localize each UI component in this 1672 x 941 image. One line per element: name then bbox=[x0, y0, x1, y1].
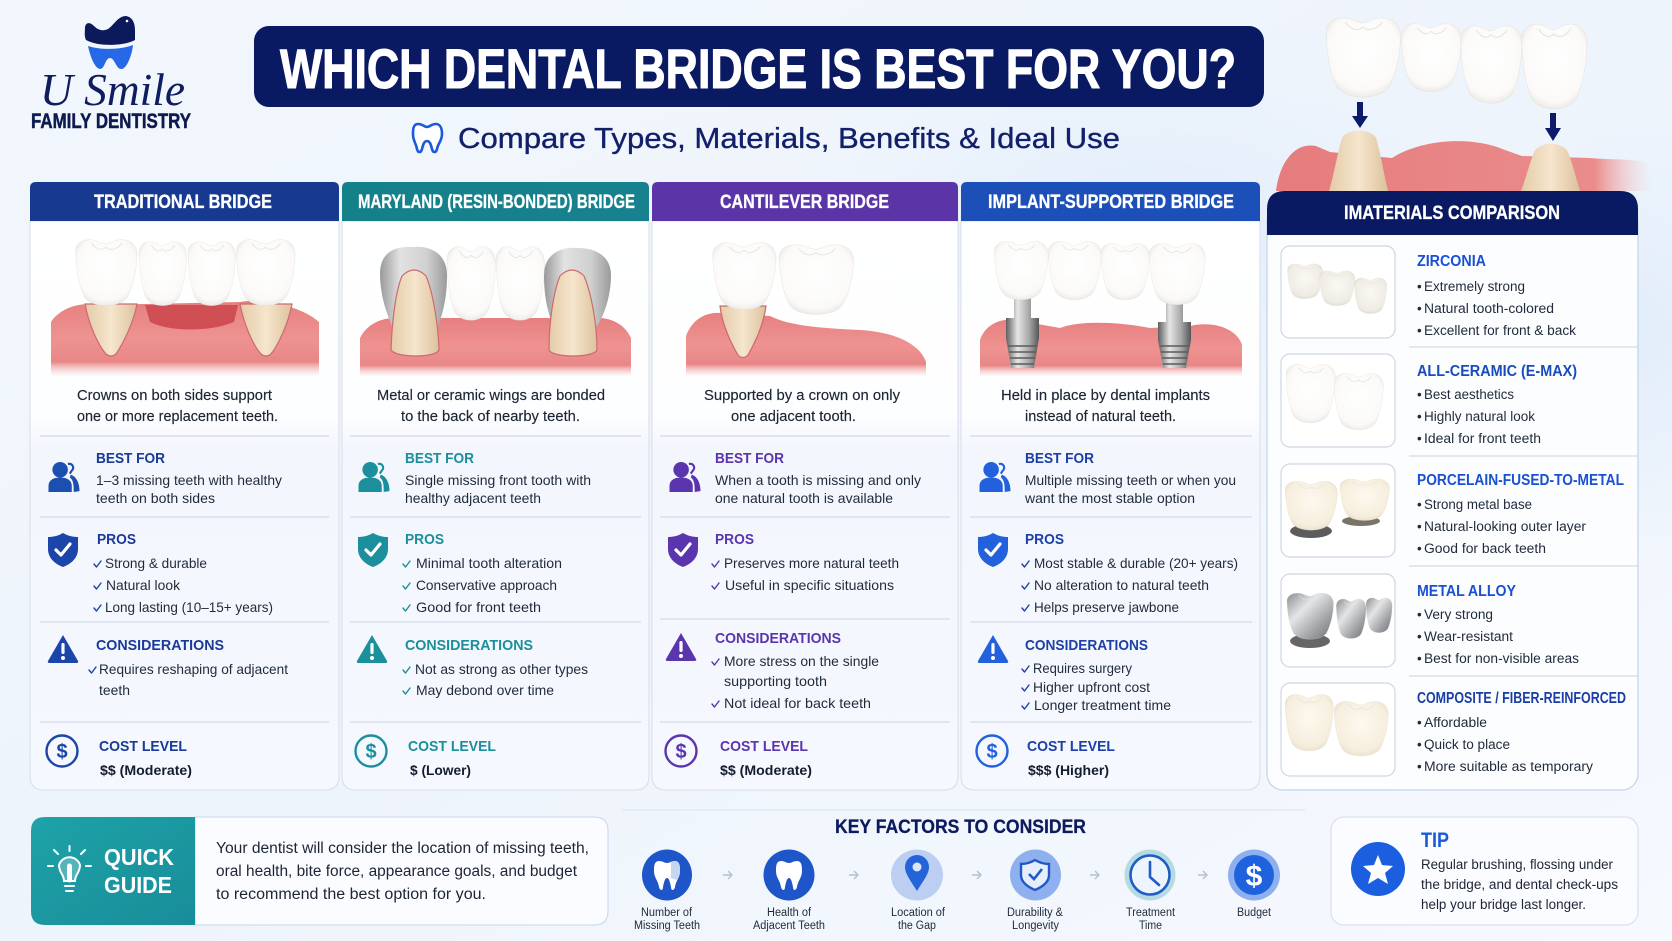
cost level: COST LEVEL bbox=[99, 738, 187, 755]
material: metal alloy: • bbox=[1417, 629, 1422, 644]
panel: implant-supported bridge bbox=[961, 182, 1260, 790]
header bbox=[1267, 191, 1638, 235]
title banner: WHICH DENTAL BRIDGE IS BEST FOR YOU? bbox=[280, 37, 1236, 100]
best for: Multiple missing teeth or when you bbox=[1025, 472, 1236, 488]
considerations: Requires reshaping of adjacent bbox=[99, 661, 288, 677]
material: composite: Quick to place bbox=[1424, 737, 1510, 752]
best for: When a tooth is missing and only bbox=[715, 472, 921, 488]
tip heading: TIP bbox=[1421, 829, 1449, 852]
illustration: bridge being placed on abutments bbox=[1276, 18, 1651, 191]
factor: number of missing teeth: Missing Teeth bbox=[634, 920, 700, 932]
pros: Useful in specific situations bbox=[725, 577, 894, 593]
material: metal alloy: • bbox=[1417, 651, 1422, 666]
description: Held in place by dental implants bbox=[1001, 388, 1210, 404]
best for bbox=[980, 450, 1236, 506]
quick guide text: oral health, bite force, appearance goals, and budget bbox=[216, 863, 578, 880]
cost level bbox=[666, 736, 812, 778]
description: one adjacent tooth. bbox=[731, 409, 856, 425]
considerations: CONSIDERATIONS bbox=[715, 630, 841, 647]
considerations: Not ideal for back teeth bbox=[724, 695, 871, 711]
quick guide text: Your dentist will consider the location of missing teeth, bbox=[216, 840, 589, 857]
material: metal alloy: • bbox=[1417, 607, 1422, 622]
material: zirconia: Excellent for front & back bbox=[1424, 323, 1576, 338]
description bbox=[377, 388, 605, 425]
icon: star bbox=[1351, 842, 1405, 896]
description: to the back of nearby teeth. bbox=[401, 409, 580, 425]
cost level: $$ (Moderate) bbox=[100, 762, 192, 778]
header: CANTILEVER BRIDGE bbox=[720, 192, 889, 213]
cost level bbox=[356, 736, 496, 778]
material: all-ceramic: Best aesthetics bbox=[1424, 387, 1514, 402]
panel: materials comparison bbox=[1267, 191, 1638, 790]
cost level bbox=[46, 736, 192, 778]
factor: treatment time bbox=[1124, 850, 1176, 932]
panel: maryland bridge bbox=[342, 182, 649, 790]
description bbox=[704, 388, 901, 425]
pros: PROS bbox=[405, 531, 444, 548]
cost level: $ bbox=[365, 741, 377, 763]
considerations: supporting tooth bbox=[724, 673, 827, 689]
best for: one natural tooth is available bbox=[715, 490, 893, 506]
material: porcelain-fused-to-metal bbox=[1281, 464, 1624, 557]
material: composite: More suitable as temporary bbox=[1424, 759, 1593, 774]
factor: health of adjacent teeth bbox=[753, 850, 825, 932]
arrows bbox=[723, 871, 1207, 879]
material: composite: • bbox=[1417, 737, 1422, 752]
illustration bbox=[980, 241, 1242, 377]
material: porcelain-fused-to-metal: Good for back teeth bbox=[1424, 541, 1546, 556]
factor: number of missing teeth: Number of bbox=[641, 907, 693, 919]
material: all-ceramic: • bbox=[1417, 409, 1422, 424]
pros: Conservative approach bbox=[416, 577, 557, 593]
considerations bbox=[48, 635, 288, 698]
header bbox=[961, 182, 1260, 221]
best for bbox=[48, 450, 282, 506]
material: composite bbox=[1281, 683, 1626, 776]
material: zirconia: Natural tooth-colored bbox=[1424, 301, 1554, 316]
considerations: May debond over time bbox=[416, 682, 554, 698]
material: metal alloy: Very strong bbox=[1424, 607, 1493, 622]
best for bbox=[670, 450, 921, 506]
considerations: teeth bbox=[99, 682, 130, 698]
best for: 1–3 missing teeth with healthy bbox=[96, 472, 282, 488]
factor: durability and longevity: Durability & bbox=[1007, 907, 1063, 919]
pros: Natural look bbox=[106, 577, 181, 593]
pros bbox=[978, 531, 1238, 615]
heading: KEY FACTORS TO CONSIDER bbox=[835, 817, 1086, 838]
header bbox=[30, 182, 339, 221]
factor: budget: Budget bbox=[1237, 907, 1272, 919]
material: metal alloy: Wear-resistant bbox=[1424, 629, 1513, 644]
factor: number of missing teeth bbox=[634, 850, 700, 932]
panel: traditional bridge bbox=[30, 182, 339, 790]
tip text bbox=[1421, 857, 1618, 912]
description bbox=[77, 388, 278, 425]
best for: BEST FOR bbox=[715, 450, 784, 467]
best for bbox=[358, 450, 591, 506]
factor: durability and longevity bbox=[1007, 850, 1063, 932]
factor: treatment time: Time bbox=[1139, 920, 1162, 932]
pros bbox=[668, 531, 899, 593]
material: all-ceramic: Ideal for front teeth bbox=[1424, 431, 1541, 446]
considerations: CONSIDERATIONS bbox=[405, 637, 533, 654]
considerations: Longer treatment time bbox=[1034, 697, 1171, 713]
material: porcelain-fused-to-metal: Natural-looking outer layer bbox=[1424, 519, 1587, 534]
quick guide text bbox=[216, 840, 589, 903]
pros: Long lasting (10–15+ years) bbox=[105, 599, 273, 615]
considerations: Higher upfront cost bbox=[1033, 679, 1150, 695]
logo: U Smile Family Dentistry: U Smile bbox=[40, 65, 185, 115]
quick guide text: to recommend the best option for you. bbox=[216, 886, 486, 903]
material: porcelain-fused-to-metal: • bbox=[1417, 541, 1422, 556]
material: metal alloy: Best for non-visible areas bbox=[1424, 651, 1579, 666]
material: all-ceramic bbox=[1281, 354, 1577, 447]
material: composite: Affordable bbox=[1424, 715, 1487, 730]
material: porcelain-fused-to-metal: PORCELAIN-FUSED-TO-METAL bbox=[1417, 472, 1624, 489]
material: all-ceramic: ALL-CERAMIC (E-MAX) bbox=[1417, 363, 1577, 380]
material: all-ceramic: Highly natural look bbox=[1424, 409, 1535, 424]
considerations: Requires surgery bbox=[1033, 660, 1132, 676]
cost level: $$$ (Higher) bbox=[1028, 762, 1109, 778]
description: instead of natural teeth. bbox=[1025, 409, 1176, 425]
pros: No alteration to natural teeth bbox=[1034, 577, 1209, 593]
considerations bbox=[357, 635, 588, 698]
material: composite: COMPOSITE / FIBER-REINFORCED bbox=[1417, 690, 1626, 707]
panel: cantilever bridge bbox=[652, 182, 958, 790]
material: composite: • bbox=[1417, 715, 1422, 730]
factor: budget: $ bbox=[1246, 860, 1263, 893]
header: MARYLAND (RESIN-BONDED) BRIDGE bbox=[358, 192, 635, 213]
best for: BEST FOR bbox=[405, 450, 474, 467]
material: all-ceramic: • bbox=[1417, 387, 1422, 402]
tip text: Regular brushing, flossing under bbox=[1421, 857, 1613, 872]
header: IMPLANT-SUPPORTED BRIDGE bbox=[988, 192, 1234, 213]
description: Metal or ceramic wings are bonded bbox=[377, 388, 605, 404]
material: metal alloy: METAL ALLOY bbox=[1417, 583, 1517, 600]
cost level: COST LEVEL bbox=[408, 738, 496, 755]
factor: location of the gap: Location of bbox=[891, 907, 946, 919]
material: composite: • bbox=[1417, 759, 1422, 774]
icon: light bulb bbox=[48, 846, 91, 891]
cost level: COST LEVEL bbox=[720, 738, 808, 755]
factor: health of adjacent teeth: Adjacent Teeth bbox=[753, 920, 825, 932]
considerations bbox=[978, 635, 1171, 713]
considerations: Not as strong as other types bbox=[415, 661, 588, 677]
pros bbox=[358, 531, 562, 615]
cost level: $ (Lower) bbox=[410, 762, 471, 778]
quick guide panel bbox=[31, 817, 608, 925]
factor: health of adjacent teeth: Health of bbox=[767, 907, 812, 919]
header bbox=[342, 182, 649, 221]
factor: location of the gap: the Gap bbox=[898, 920, 936, 932]
best for: BEST FOR bbox=[96, 450, 165, 467]
illustration bbox=[51, 240, 319, 377]
best for: teeth on both sides bbox=[96, 490, 215, 506]
best for: healthy adjacent teeth bbox=[405, 490, 541, 506]
quick guide heading: GUIDE bbox=[104, 872, 172, 898]
material: porcelain-fused-to-metal: • bbox=[1417, 519, 1422, 534]
header: TRADITIONAL BRIDGE bbox=[94, 192, 272, 213]
considerations: CONSIDERATIONS bbox=[1025, 637, 1148, 654]
cost level: $$ (Moderate) bbox=[720, 762, 812, 778]
header bbox=[652, 182, 958, 221]
material: zirconia bbox=[1281, 246, 1576, 338]
pros bbox=[48, 531, 273, 615]
material: all-ceramic: • bbox=[1417, 431, 1422, 446]
header: IMATERIALS COMPARISON bbox=[1344, 203, 1560, 224]
tip text: help your bridge last longer. bbox=[1421, 897, 1586, 912]
material: porcelain-fused-to-metal: • bbox=[1417, 497, 1422, 512]
material: zirconia: • bbox=[1417, 323, 1422, 338]
illustration bbox=[360, 247, 631, 377]
pros: Preserves more natural teeth bbox=[724, 555, 899, 571]
pros: Strong & durable bbox=[105, 555, 207, 571]
illustration bbox=[686, 243, 926, 377]
logo: U Smile Family Dentistry: FAMILY DENTISTRY bbox=[31, 109, 191, 133]
pros: PROS bbox=[1025, 531, 1064, 548]
pros: Minimal tooth alteration bbox=[416, 555, 562, 571]
factor: treatment time: Treatment bbox=[1126, 907, 1176, 919]
pros: Most stable & durable (20+ years) bbox=[1034, 555, 1238, 571]
factor: location of the gap bbox=[891, 850, 946, 932]
considerations: CONSIDERATIONS bbox=[96, 637, 224, 654]
description: one or more replacement teeth. bbox=[77, 409, 278, 425]
factor: budget bbox=[1228, 850, 1280, 919]
best for: BEST FOR bbox=[1025, 450, 1094, 467]
material: zirconia: • bbox=[1417, 279, 1422, 294]
considerations bbox=[666, 630, 879, 711]
material: porcelain-fused-to-metal: Strong metal base bbox=[1424, 497, 1532, 512]
quick guide heading bbox=[104, 844, 174, 898]
cost level: $ bbox=[675, 741, 687, 763]
cost level: $ bbox=[56, 741, 68, 763]
description bbox=[1001, 388, 1210, 425]
tip panel bbox=[1331, 817, 1638, 925]
pros: PROS bbox=[715, 531, 754, 548]
pros: PROS bbox=[97, 531, 136, 548]
description: Supported by a crown on only bbox=[704, 388, 901, 404]
description: Crowns on both sides support bbox=[77, 388, 272, 404]
pros: Good for front teeth bbox=[416, 599, 541, 615]
cost level bbox=[976, 736, 1115, 778]
subtitle with tooth icon: Compare Types, Materials, Benefits & Ideal Use bbox=[458, 123, 1120, 155]
material: zirconia: ZIRCONIA bbox=[1417, 253, 1486, 270]
considerations: More stress on the single bbox=[724, 653, 879, 669]
quick guide heading: QUICK bbox=[104, 844, 174, 870]
cost level: $ bbox=[986, 741, 998, 763]
material: zirconia: Extremely strong bbox=[1424, 279, 1525, 294]
best for: Single missing front tooth with bbox=[405, 472, 591, 488]
tip text: the bridge, and dental check-ups bbox=[1421, 877, 1618, 892]
best for: want the most stable option bbox=[1024, 490, 1195, 506]
material: zirconia: • bbox=[1417, 301, 1422, 316]
key factors section bbox=[622, 810, 1305, 932]
pros: Helps preserve jawbone bbox=[1034, 599, 1179, 615]
cost level: COST LEVEL bbox=[1027, 738, 1115, 755]
logo: U Smile Family Dentistry bbox=[31, 16, 191, 133]
factor: durability and longevity: Longevity bbox=[1012, 920, 1059, 932]
material: metal alloy bbox=[1281, 574, 1579, 667]
title banner bbox=[254, 26, 1264, 107]
